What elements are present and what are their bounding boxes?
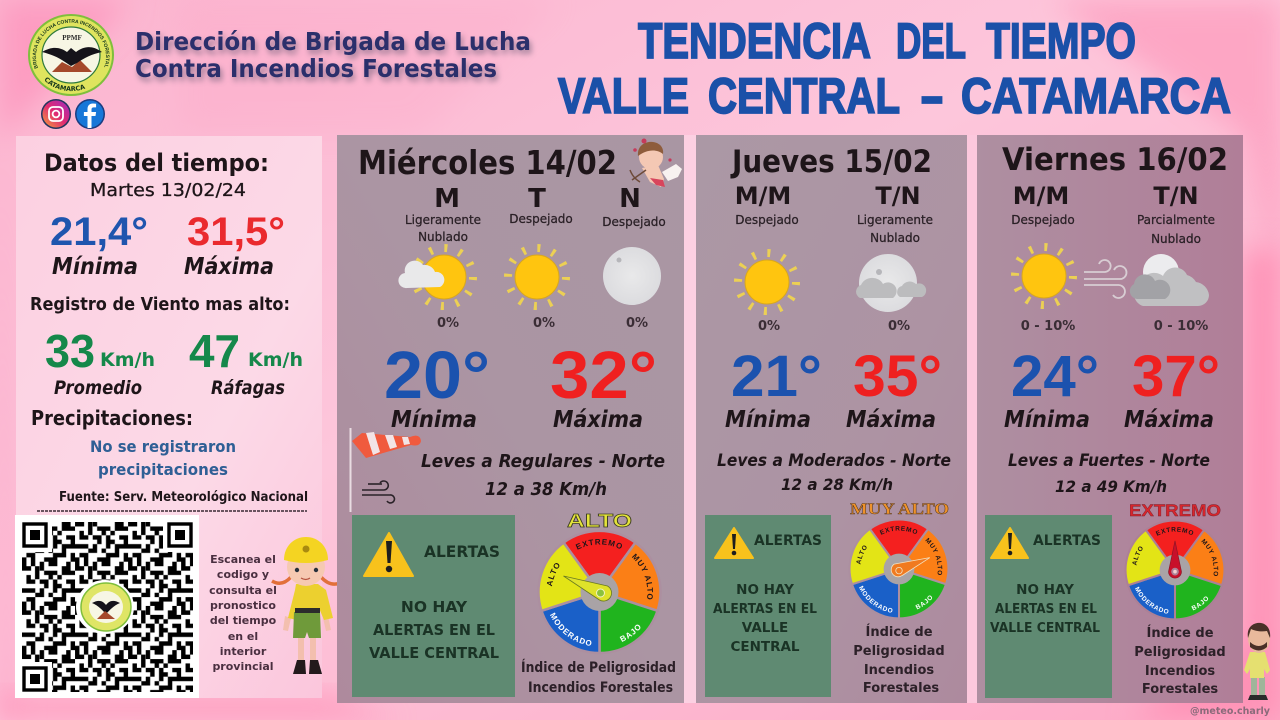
average wind: [45, 325, 155, 377]
title: CATAMARCA: [961, 68, 1231, 124]
alert heading: ALERTAS: [424, 542, 500, 561]
period N: Despejado: [602, 215, 666, 229]
period T: Despejado: [509, 212, 573, 226]
label maxima: Máxima: [1124, 407, 1214, 433]
min temp: 24°: [1011, 344, 1099, 409]
organisation name: Dirección de Brigada de Lucha: [135, 27, 531, 56]
alert text: NO HAY: [736, 582, 794, 598]
title: DEL: [896, 13, 966, 69]
gauge caption: Incendios: [864, 663, 934, 678]
wind record heading: Registro de Viento mas alto:: [30, 294, 290, 315]
wind description: [717, 451, 951, 494]
period M/M: Despejado: [735, 213, 799, 227]
alert text: NO HAY: [401, 598, 468, 616]
precipitation text: precipitaciones: [98, 460, 228, 479]
organisation name: Contra Incendios Forestales: [137, 58, 499, 87]
period T/N: [857, 182, 933, 245]
gauge caption: Incendios: [1145, 664, 1215, 679]
minimum temperature yesterday: 21,4°: [50, 210, 148, 254]
period M/M: M/M: [735, 182, 791, 210]
alert text: [990, 582, 1100, 636]
rain probabilities: 0%: [437, 316, 459, 331]
title: CENTRAL: [708, 68, 900, 124]
scan text: interior: [220, 645, 267, 658]
day heading: Jueves 15/02: [730, 144, 932, 180]
icon: warning: [364, 533, 413, 576]
alert box: [352, 515, 515, 697]
rain probabilities: 0%: [533, 316, 555, 331]
scan text: [209, 553, 277, 673]
period N: N: [619, 184, 641, 214]
max temp: 37°: [1132, 344, 1220, 409]
alert box: [705, 515, 831, 697]
icon: warning: [991, 528, 1028, 558]
wind description: [421, 451, 665, 500]
alert text: ALERTAS EN EL: [713, 601, 817, 617]
organisation name: Dirección de Brigada de Lucha: [137, 31, 533, 60]
alert heading: ALERTAS: [754, 533, 822, 549]
gauge caption: Forestales: [863, 681, 939, 696]
icon: warning: [715, 528, 753, 558]
wind gusts: 47: [189, 325, 240, 377]
panel: datos del tiempo: [16, 136, 322, 698]
gauge caption: Índice de: [1146, 625, 1214, 641]
gauge caption: Peligrosidad: [853, 644, 945, 659]
icon: sun: [1015, 247, 1073, 305]
gauge caption: Índice de Peligrosidad: [521, 659, 676, 676]
label maxima: Máxima: [846, 407, 936, 433]
illustration: meteorologist avatar: [1244, 623, 1270, 700]
level label extremo: EXTREMO: [1129, 501, 1221, 520]
source: Fuente: Serv. Meteorológico Nacional: [59, 490, 308, 505]
gauge: extremo: MODERADO: [1135, 586, 1168, 614]
day heading: Miércoles 14/02: [358, 143, 617, 182]
organisation name: [135, 27, 533, 87]
period N: [602, 184, 666, 229]
period T/N: T/N: [1153, 182, 1199, 210]
alert text: VALLE: [742, 620, 788, 636]
icon: sun: [508, 248, 566, 306]
scan text: en el: [228, 630, 258, 643]
period M: Nublado: [418, 230, 468, 244]
level label muy alto: MUY ALTO: [850, 501, 949, 518]
period M/M: Despejado: [1011, 213, 1075, 227]
gauge: extremo: ALTO: [1132, 546, 1143, 566]
average wind: 33: [45, 325, 95, 377]
period T: T: [528, 184, 546, 214]
panel: jueves: [696, 135, 967, 703]
title: TENDENCIA: [638, 13, 871, 69]
organisation name: Contra Incendios Forestales: [135, 54, 497, 83]
label minima: Mínima: [1004, 407, 1090, 433]
gauge caption: [853, 624, 945, 696]
min temp: 20°: [384, 338, 490, 413]
label minima: Mínima: [52, 254, 138, 280]
icon: facebook: [75, 99, 105, 129]
alert heading: ALERTAS: [1033, 533, 1101, 549]
wind description: Leves a Regulares - Norte: [421, 451, 665, 472]
gauge: muy alto: ALTO: [856, 546, 867, 564]
icon: moon with clouds: [1130, 254, 1209, 306]
panel: miercoles: [337, 135, 684, 703]
gauge: extremo: EXTREMO: [1156, 527, 1194, 536]
icon: moon: [603, 247, 661, 305]
panel: viernes: [977, 135, 1243, 703]
rain probabilities: 0%: [888, 319, 910, 334]
alert text: NO HAY: [1016, 582, 1074, 598]
wind gusts: [189, 325, 303, 377]
rain probabilities: 0%: [758, 319, 780, 334]
max temp: 35°: [853, 344, 942, 409]
scan text: pronostico: [210, 599, 276, 612]
logo: Brigada de Lucha Contra Incendios Forestales: CATAMARCA: [45, 78, 86, 92]
gauge caption: [521, 659, 676, 696]
icon: sun with cloud: [398, 248, 473, 306]
gauge: alto: ALTO: [546, 563, 560, 586]
period M: Ligeramente: [405, 213, 481, 227]
cupid: [630, 138, 682, 187]
day heading: Viernes 16/02: [1002, 142, 1228, 178]
gauge caption: Incendios Forestales: [528, 680, 673, 696]
maximum temperature yesterday: 31,5°: [187, 210, 285, 254]
gauge: extremo: BAJO: [1191, 596, 1208, 610]
gauge caption: Forestales: [1142, 682, 1218, 697]
period T: [509, 184, 573, 226]
label rafagas: Ráfagas: [211, 377, 285, 399]
alert text: [369, 598, 499, 662]
period M/M: [1011, 182, 1075, 227]
period M: [405, 184, 481, 244]
level label alto: ALTO: [567, 511, 632, 531]
credit: @meteo.charly: [1190, 706, 1270, 717]
alert text: VALLE CENTRAL: [369, 644, 499, 662]
gauge caption: Peligrosidad: [1134, 645, 1226, 660]
qr code: [15, 515, 199, 698]
wind description: 12 a 49 Km/h: [1055, 477, 1167, 496]
scan text: codigo y: [217, 568, 269, 581]
gauge: alto: EXTREMO: [576, 539, 622, 550]
scan text: del tiempo: [210, 614, 277, 627]
label maxima: Máxima: [553, 407, 643, 433]
title: -: [920, 68, 944, 124]
gauge: alto: MUY ALTO: [632, 554, 653, 600]
precipitation text: [90, 437, 236, 479]
period M/M: M/M: [1013, 182, 1069, 210]
gauge caption: [1134, 625, 1226, 697]
label maxima: Máxima: [184, 254, 274, 280]
rain probabilities: [758, 319, 910, 334]
gauge: muy alto: EXTREMO: [880, 526, 918, 535]
rain probabilities: 0%: [626, 316, 648, 331]
heading: datos del tiempo: Datos del tiempo:: [44, 149, 269, 177]
gauge: alto: BAJO: [620, 624, 640, 642]
gauge: extremo: MUY ALTO: [1201, 538, 1218, 576]
period T/N: Nublado: [870, 231, 920, 245]
rain probabilities: [437, 316, 648, 331]
icon: windsock: [350, 428, 421, 512]
gauge: muy alto: MODERADO: [859, 586, 892, 612]
min temp: 21°: [731, 344, 822, 409]
period M/M: [735, 182, 799, 227]
precipitation heading: Precipitaciones:: [31, 406, 193, 430]
gauge: muy alto: BAJO: [915, 596, 932, 610]
rain probabilities: 0 - 10%: [1154, 319, 1208, 334]
wind description: 12 a 28 Km/h: [781, 475, 893, 494]
period T/N: [1137, 182, 1215, 246]
scan text: provincial: [212, 660, 274, 673]
max temp: 32°: [550, 338, 657, 413]
gauge: muy alto: [850, 520, 948, 618]
icon: instagram: [41, 99, 71, 129]
scan text: Escanea el: [210, 553, 276, 566]
alert text: [713, 582, 817, 655]
gauge: extremo: [1126, 522, 1224, 618]
scan text: consulta el: [209, 584, 277, 597]
period T/N: Nublado: [1151, 232, 1201, 246]
alert box: [985, 515, 1112, 698]
label minima: Mínima: [391, 407, 477, 433]
gauge caption: Índice de: [865, 624, 933, 640]
logo: Brigada de Lucha Contra Incendios Forestales: [28, 14, 114, 96]
label minima: Mínima: [725, 407, 811, 433]
period T/N: Ligeramente: [857, 213, 933, 227]
title: [558, 13, 1231, 124]
alert text: ALERTAS EN EL: [373, 621, 495, 639]
wind gusts: Km/h: [248, 349, 303, 371]
precipitation text: No se registraron: [90, 437, 236, 456]
rain probabilities: 0 - 10%: [1021, 319, 1075, 334]
wind description: 12 a 38 Km/h: [485, 479, 607, 500]
icon: wind: [1084, 260, 1126, 298]
wind description: Leves a Fuertes - Norte: [1008, 451, 1210, 471]
alert text: ALERTAS EN EL: [995, 601, 1097, 617]
gauge: muy alto: MUY ALTO: [925, 538, 942, 575]
average wind: Km/h: [100, 349, 155, 371]
gauge: alto: MODERADO: [550, 612, 592, 646]
logo: Brigada de Lucha Contra Incendios Forestales: PPMF: [62, 34, 82, 42]
wind description: [1008, 451, 1210, 496]
wind description: Leves a Moderados - Norte: [717, 451, 951, 471]
icon: sun: [738, 253, 796, 311]
label promedio: Promedio: [54, 377, 142, 399]
gauge: alto: [540, 532, 660, 652]
date: Martes 13/02/24: [90, 180, 246, 201]
alert text: CENTRAL: [730, 639, 800, 655]
title: VALLE: [558, 68, 689, 124]
period T/N: T/N: [875, 182, 921, 210]
illustration: ranger girl: [272, 537, 340, 674]
icon: moon with clouds: [856, 254, 926, 312]
alert text: VALLE CENTRAL: [990, 620, 1100, 636]
rain probabilities: [1021, 319, 1208, 334]
period M: M: [434, 184, 460, 214]
period T/N: Parcialmente: [1137, 213, 1215, 227]
title: TIEMPO: [986, 13, 1136, 69]
icon: wind: [362, 481, 394, 503]
